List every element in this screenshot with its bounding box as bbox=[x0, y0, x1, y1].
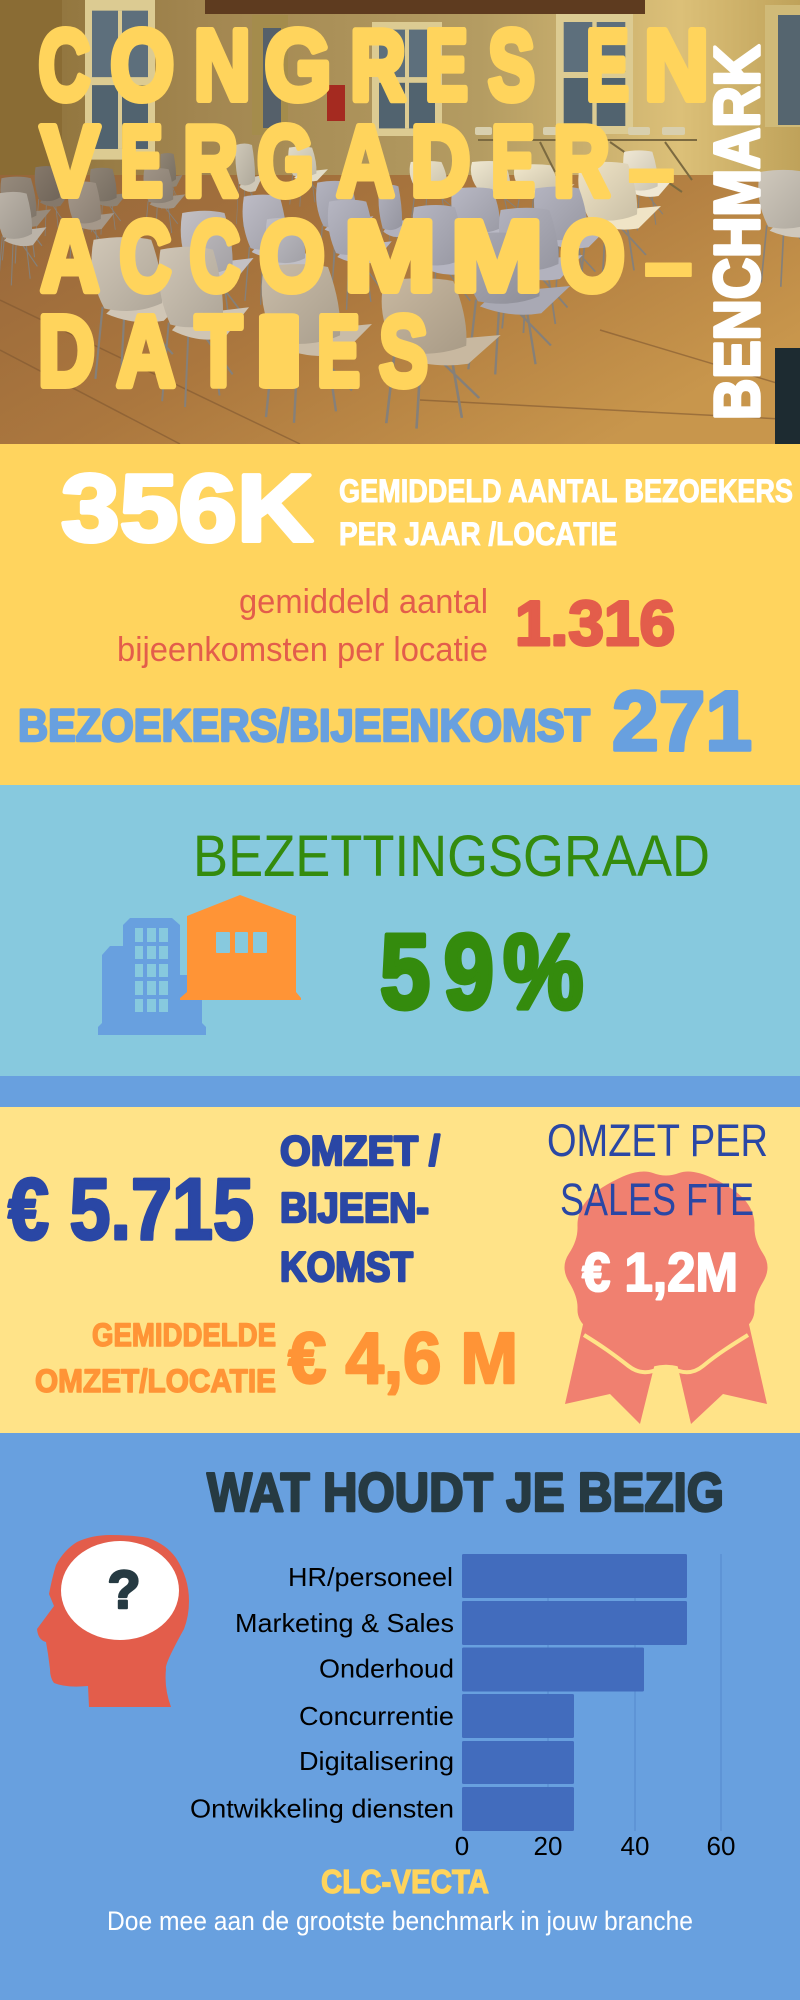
bar chart bbox=[190, 1554, 735, 1861]
title: G bbox=[257, 106, 314, 218]
stat: omzet per bijeenkomst: € 5.715 bbox=[8, 1161, 254, 1258]
title: E bbox=[317, 296, 360, 408]
label: omzet / bijeenkomst: BIJEEN- bbox=[280, 1184, 429, 1231]
stat: 356K: 356K bbox=[61, 455, 313, 562]
icon: head with question mark bbox=[37, 1535, 189, 1707]
icon: rosette badge bbox=[564, 1171, 768, 1424]
title: R bbox=[350, 10, 406, 122]
title: M bbox=[344, 200, 436, 312]
bar chart: Onderhoud bbox=[319, 1654, 454, 1684]
bar chart: Marketing & Sales bbox=[235, 1608, 454, 1638]
stat: € 4,6 M: € 4,6 M bbox=[288, 1319, 518, 1399]
divider band bbox=[0, 1076, 800, 1107]
bar chart: Digitalisering bbox=[299, 1746, 454, 1776]
label: gemiddelde omzet per locatie bbox=[35, 1317, 276, 1399]
stat: 271: 271 bbox=[612, 674, 752, 768]
hero photo: conference room with white chairs bbox=[0, 0, 800, 444]
title: S bbox=[488, 10, 535, 122]
title: O bbox=[560, 200, 625, 312]
title: M bbox=[451, 200, 543, 312]
title: E bbox=[120, 106, 163, 218]
title: - bbox=[624, 109, 679, 226]
title: E bbox=[425, 10, 468, 122]
heading: bezettingsgraad: BEZETTINGSGRAAD bbox=[193, 824, 710, 889]
label: gemiddeld aantal bijeenkomsten bbox=[117, 583, 488, 669]
title bbox=[38, 10, 709, 408]
benchmark vertical label: BENCHMARK bbox=[701, 45, 773, 420]
heading: wat houdt je bezig: WAT HOUDT JE BEZIG bbox=[207, 1461, 724, 1523]
bar chart: 40 bbox=[621, 1831, 649, 1861]
title: S bbox=[379, 296, 428, 408]
label: bezoekers per bijeenkomst: BEZOEKERS/BIJEENKOMST bbox=[18, 700, 590, 751]
label: gemiddelde omzet per locatie: GEMIDDELDE bbox=[92, 1317, 276, 1353]
label: omzet / bijeenkomst bbox=[280, 1127, 440, 1290]
label: omzet / bijeenkomst: OMZET / bbox=[280, 1127, 440, 1174]
title: - bbox=[640, 202, 697, 320]
title: G bbox=[264, 10, 332, 122]
stat: 1.316: 1.316 bbox=[515, 589, 675, 659]
title: E bbox=[491, 106, 535, 218]
label: gemiddeld aantal bezoekers: PER JAAR /LOCATIE bbox=[339, 516, 617, 552]
icon: head with question mark: ? bbox=[108, 1560, 140, 1620]
title: A bbox=[336, 106, 394, 218]
panel: wat houdt je bezig bbox=[0, 1433, 800, 2000]
label: gemiddeld aantal bezoekers bbox=[339, 473, 793, 552]
label: omzet per sales fte bbox=[547, 1115, 768, 1225]
title: A bbox=[116, 296, 176, 408]
panel: bezoekers statistics bbox=[0, 444, 800, 785]
stat: € 1,2M: € 1,2M bbox=[582, 1241, 738, 1303]
title: D bbox=[410, 106, 470, 218]
title: I bbox=[253, 296, 305, 408]
title: R bbox=[183, 106, 238, 218]
title: O bbox=[259, 200, 325, 312]
stat: 59%: 59% bbox=[380, 912, 583, 1031]
bar chart: Ontwikkeling diensten bbox=[190, 1794, 454, 1824]
panel: bezettingsgraad bbox=[0, 785, 800, 1076]
bar chart: 20 bbox=[534, 1831, 562, 1861]
label: gemiddeld aantal bijeenkomsten: gemiddeld aantal bbox=[239, 583, 488, 621]
label: gemiddeld aantal bijeenkomsten: bijeenkomsten per locatie bbox=[117, 631, 488, 669]
bar chart: HR/personeel bbox=[288, 1562, 453, 1592]
panel: omzet bbox=[0, 1107, 800, 1433]
title: C bbox=[119, 200, 171, 312]
title: O bbox=[110, 10, 174, 122]
title: A bbox=[40, 200, 100, 312]
title: N bbox=[194, 10, 251, 122]
glass table and rear chairs bbox=[475, 127, 697, 192]
label: omzet / bijeenkomst: KOMST bbox=[280, 1243, 413, 1290]
title: R bbox=[553, 106, 610, 218]
panel: hero header bbox=[0, 0, 800, 444]
title: V bbox=[40, 106, 100, 218]
title: N bbox=[644, 10, 709, 122]
label: omzet per sales fte: SALES FTE bbox=[560, 1174, 754, 1225]
title: T bbox=[195, 296, 242, 408]
bar chart: Concurrentie bbox=[299, 1701, 454, 1731]
tagline: Doe mee aan de grootste benchmark in jouw branche bbox=[107, 1906, 693, 1936]
bar chart: 60 bbox=[707, 1831, 735, 1861]
brand: clc-vecta: CLC-VECTA bbox=[321, 1863, 489, 1900]
label: gemiddelde omzet per locatie: OMZET/LOCATIE bbox=[35, 1363, 276, 1399]
title: E bbox=[586, 10, 629, 122]
title: D bbox=[38, 296, 95, 408]
title: C bbox=[38, 10, 90, 122]
title: C bbox=[189, 200, 240, 312]
bar chart: 0 bbox=[455, 1831, 469, 1861]
icon: buildings bbox=[98, 895, 301, 1035]
